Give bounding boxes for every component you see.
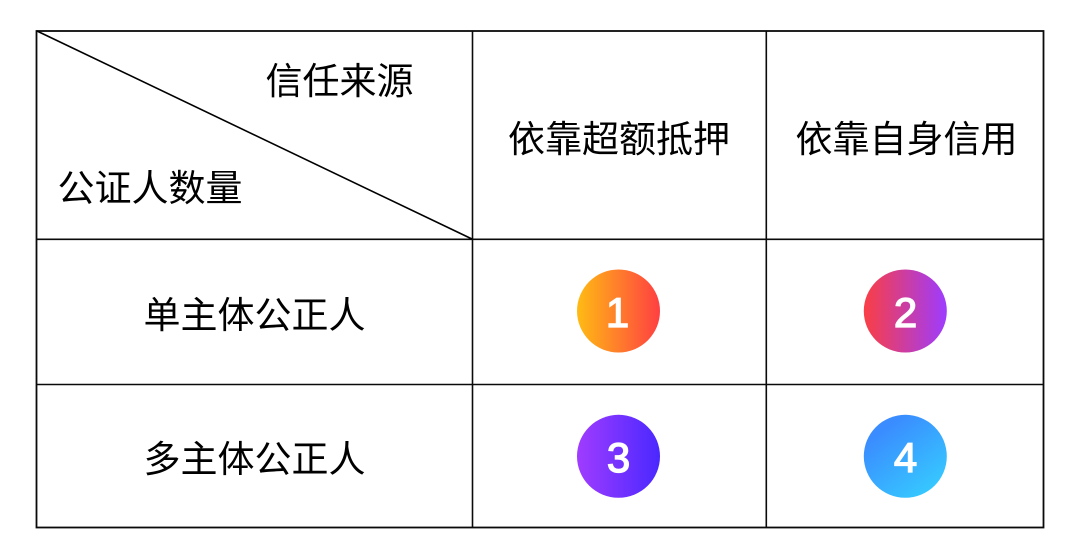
badge 4: 4: [894, 434, 917, 481]
column heading: own credit: 依靠自身信用: [796, 119, 1018, 160]
diagonal header divider: [37, 31, 472, 239]
badge 3: 3: [607, 434, 630, 481]
header: trust source: 信任来源: [266, 61, 414, 102]
badge 1: [577, 270, 660, 352]
badge 4: [864, 415, 947, 498]
badge 2: 2: [894, 289, 917, 336]
column heading: over-collateralization: 依靠超额抵押: [508, 119, 730, 160]
row heading: single-entity notary: 单主体公正人: [144, 295, 366, 336]
header: number of notaries: 公证人数量: [58, 168, 242, 209]
badge 2: [864, 270, 947, 352]
badge 3: [577, 415, 660, 498]
row heading: multi-entity notary: 多主体公正人: [144, 439, 366, 480]
badge 1: 1: [606, 289, 629, 336]
